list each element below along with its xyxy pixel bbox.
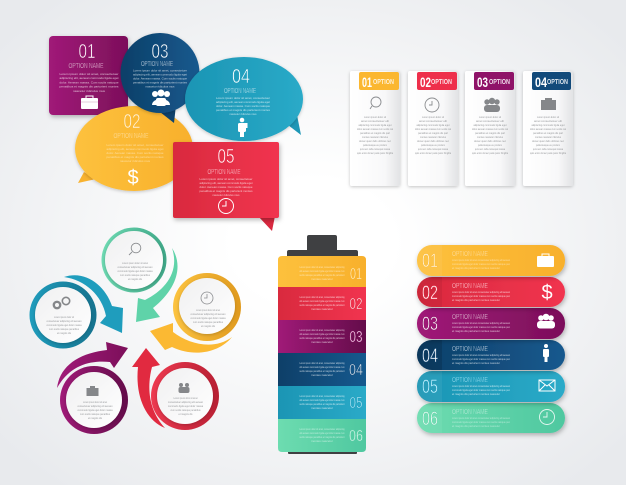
icon: clock: [425, 98, 439, 112]
segment 03: [278, 320, 366, 353]
segment 05: montes nascetur: [311, 406, 333, 410]
bubble 04 teal: [185, 57, 303, 141]
pill 06: OPTION NAME: [452, 409, 488, 416]
text: montes nascetur ridiculus: [477, 135, 503, 139]
step: green circle and arrow: cum sociis natoque penatibus: [120, 273, 150, 277]
pill 03: 03: [422, 314, 438, 335]
bubble 04 teal: dolor. Aenean massa. Cum sociis natoque: [216, 104, 270, 108]
text: quis enim donec pede justo fringilla: [357, 151, 393, 155]
step: green circle and arrow: et magnis dis: [128, 277, 142, 281]
segment 03: elit aenean commodo ligula eget dolor massa cum: [300, 332, 345, 336]
segment 03: sociis natoque penatibus et magnis dis parturient: [300, 336, 345, 340]
pill 05: et magnis dis parturient montes nascetur: [452, 392, 500, 396]
step: yellow circle and arrow: cum sociis natoque penatibus: [193, 320, 223, 324]
bubble 04 teal: nascetur ridiculus mus: [230, 112, 257, 116]
step: yellow circle and arrow: et magnis dis: [201, 324, 215, 328]
bubble 04 teal: penatibus et magnis dis parturient montes: [216, 108, 270, 112]
bubble 03 navy: Lorem ipsum dolor sit amet, consectetuer: [133, 68, 187, 72]
text: pellentesque eu pretium: [536, 143, 560, 147]
step: red circle and arrow: cum sociis natoque penatibus: [170, 408, 201, 412]
step: yellow circle and arrow: consectetuer adipiscing elit aenean: [190, 312, 226, 316]
bubble 02 yellow: dolor. Aenean massa. Cum sociis natoque: [106, 151, 164, 155]
segment 03: 03: [350, 329, 363, 346]
text: donec quam felis ultricies nec: [417, 139, 449, 143]
step: yellow circle and arrow: [150, 273, 241, 353]
segment 04: Lorem ipsum dolor sit amet, consectetuer adipiscing: [300, 361, 345, 365]
bubble 01 purple square: penatibus et magnis dis parturient montes: [60, 84, 119, 88]
segment 02: montes nascetur: [311, 307, 333, 311]
pill 02: OPTION NAME: [452, 283, 488, 290]
battery cap: [287, 235, 358, 454]
pill 01: 01: [422, 251, 438, 272]
bubble 01 purple square: 01: [78, 41, 96, 63]
bubble 04 teal: OPTION NAME: [224, 88, 256, 95]
icon: dollar: $: [127, 167, 139, 189]
bubble 03 navy: OPTION NAME: [141, 61, 173, 68]
card 04: [523, 71, 573, 186]
segment 05: Lorem ipsum dolor sit amet, consectetuer adipiscing: [300, 394, 345, 398]
icon: magnifier: [370, 97, 381, 109]
text: quis sem nulla consequat massa: [360, 147, 390, 151]
segment 01: elit aenean commodo ligula eget dolor massa cum: [300, 269, 345, 273]
segment 06: Lorem ipsum dolor sit amet, consectetuer adipiscing: [300, 427, 345, 431]
pill 03: [417, 308, 565, 339]
step: teal circle and arrow: cum sociis natoque penatibus: [49, 327, 79, 331]
step: red circle and arrow: [132, 348, 219, 430]
bubble 04 teal: Lorem ipsum dolor sit amet, consectetuer: [216, 96, 270, 100]
bubble 05 red: OPTION NAME: [208, 169, 241, 176]
text: penatibus et magnis dis part: [360, 131, 390, 135]
bubble 03 navy: 03: [152, 41, 168, 63]
pill 02: et magnis dis parturient montes nascetur: [452, 298, 500, 302]
text: donec quam felis ultricies nec: [474, 139, 506, 143]
text: pellentesque eu pretium: [421, 143, 445, 147]
text: [415, 115, 451, 155]
text: quis sem nulla consequat massa: [533, 147, 563, 151]
segment 06: 06: [349, 428, 363, 445]
panel: speech bubbles: [49, 33, 303, 231]
text: adipiscing commodo ligula eget: [532, 123, 565, 127]
text: montes nascetur ridiculus: [362, 135, 388, 139]
bubble 02 yellow: penatibus et magnis dis parturient montes: [106, 155, 164, 159]
text: penatibus et magnis dis part: [418, 131, 448, 135]
step: teal circle and arrow: et magnis dis: [57, 331, 71, 335]
segment 04: [278, 353, 366, 386]
text: amet consectetuer elit: [534, 119, 562, 123]
pill 04: 04: [422, 346, 438, 367]
text: donec quam felis ultricies nec: [359, 139, 391, 143]
icon: magnifier: [129, 243, 141, 255]
text: dolor aenean massa cum sociis nat: [415, 127, 451, 131]
icon: person: [238, 118, 248, 137]
step: yellow circle and arrow: Lorem ipsum dolor sit amet: [196, 308, 220, 312]
step: purple circle and arrow: [57, 342, 128, 434]
pill 03: commodo ligula eget dolor massa cum sociis natoque pen: [452, 325, 510, 329]
bubble 03 navy: nascetur ridiculus mus: [146, 84, 175, 88]
pill 05: Lorem ipsum dolor sit amet consectetuer adipiscing elit aenean: [452, 384, 510, 388]
card 03: [465, 71, 515, 186]
text: quis enim donec pede justo fringilla: [530, 151, 566, 155]
card 04: 04: [535, 74, 547, 90]
text: adipiscing commodo ligula eget: [416, 123, 450, 127]
pill 05: 05: [422, 377, 438, 398]
pill 02: 02: [422, 283, 438, 304]
segment 06: montes nascetur: [311, 439, 333, 443]
bubble 02 yellow: [75, 106, 193, 191]
text: quis enim donec pede justo fringilla: [415, 151, 451, 155]
icon: person: [543, 344, 549, 362]
panel: option cards: [350, 71, 573, 186]
step: teal circle and arrow: consectetuer adipiscing elit aenean: [46, 319, 82, 323]
text: dolor aenean massa cum sociis nat: [530, 127, 566, 131]
text: pellentesque eu pretium: [478, 143, 502, 147]
text: quis sem nulla consequat massa: [475, 147, 505, 151]
segment 02: [278, 287, 366, 320]
pill 01: Lorem ipsum dolor sit amet consectetuer adipiscing elit aenean: [452, 258, 510, 262]
text: dolor aenean massa cum sociis nat: [357, 127, 393, 131]
text: montes nascetur ridiculus: [420, 135, 446, 139]
icon: people: [178, 383, 190, 393]
text: quis enim donec pede justo fringilla: [472, 151, 508, 155]
text: penatibus et magnis dis part: [533, 131, 563, 135]
panel: option pills: [416, 245, 565, 433]
text: Lorem ipsum dolor sit: [537, 115, 559, 119]
bubble 05 red: Lorem ipsum dolor sit amet, consectetuer: [200, 177, 252, 181]
segment 01: montes nascetur: [311, 277, 333, 281]
segment 06: [278, 419, 366, 452]
text: donec quam felis ultricies nec: [532, 139, 564, 143]
bubble 05 red: adipiscing elit, aenean commodo ligula eget: [200, 181, 253, 185]
step: purple circle and arrow: commodo ligula eget dolor massa: [78, 408, 113, 412]
bubble 03 navy: penatibus et magnis dis parturient montes: [133, 80, 187, 84]
segment 04: elit aenean commodo ligula eget dolor massa cum: [300, 365, 345, 369]
bubble 05 red: nascetur ridiculus mus: [212, 193, 240, 197]
pill 06: commodo ligula eget dolor massa cum sociis natoque pen: [452, 420, 510, 424]
chart: circular arrows cycle: [30, 228, 241, 434]
card 01: OPTION: [373, 79, 394, 86]
icon: clock: [540, 410, 554, 424]
card 02: OPTION: [431, 79, 452, 86]
pill 03: et magnis dis parturient montes nascetur: [452, 329, 500, 333]
pill 06: et magnis dis parturient montes nascetur: [452, 424, 500, 428]
pill 01: OPTION NAME: [452, 251, 488, 258]
bubble 01 purple square: adipiscing elit, aenean commodo ligula eget: [60, 76, 119, 80]
text: Lorem ipsum dolor sit: [364, 115, 386, 119]
bubble 04 teal: adipiscing elit, aenean commodo ligula eget: [216, 100, 270, 104]
step: teal circle and arrow: [30, 275, 123, 348]
pill 02: commodo ligula eget dolor massa cum sociis natoque pen: [452, 294, 510, 298]
step: purple circle and arrow: et magnis dis: [88, 416, 102, 420]
pill 04: commodo ligula eget dolor massa cum sociis natoque pen: [452, 357, 510, 361]
text: [357, 115, 393, 155]
segment 05: elit aenean commodo ligula eget dolor massa cum: [300, 398, 345, 402]
icon: briefcase: [86, 386, 98, 396]
text: amet consectetuer elit: [419, 119, 447, 123]
bubble 02 yellow: adipiscing elit, aenean commodo ligula eget: [106, 147, 164, 151]
bubble 01 purple square: Lorem ipsum dolor sit amet, consectetuer: [60, 72, 118, 76]
icon: briefcase: [81, 96, 98, 109]
card 02: 02: [420, 74, 431, 90]
pill 06: 06: [422, 409, 438, 430]
text: penatibus et magnis dis part: [475, 131, 505, 135]
segment 02: Lorem ipsum dolor sit amet, consectetuer adipiscing: [300, 295, 345, 299]
segment 04: sociis natoque penatibus et magnis dis parturient: [300, 369, 345, 373]
icon: clock: [218, 198, 234, 214]
pill 02: [417, 277, 565, 307]
icon: people: [484, 98, 500, 112]
icon: dollar: $: [541, 282, 553, 304]
text: amet consectetuer elit: [476, 119, 504, 123]
icon: envelope: [539, 380, 555, 391]
pill 05: OPTION NAME: [452, 377, 488, 384]
segment 03: montes nascetur: [311, 340, 333, 344]
pill 03: Lorem ipsum dolor sit amet consectetuer adipiscing elit aenean: [452, 321, 510, 325]
segment 05: sociis natoque penatibus et magnis dis parturient: [300, 402, 345, 406]
bubble 02 yellow: 02: [124, 111, 140, 133]
card 04: OPTION: [547, 79, 568, 86]
text: dolor aenean massa cum sociis nat: [472, 127, 508, 131]
step: red circle and arrow: Lorem ipsum dolor sit amet: [174, 396, 198, 400]
step: green circle and arrow: commodo ligula eget dolor massa: [118, 269, 153, 273]
step: yellow circle and arrow: commodo ligula eget dolor massa: [190, 316, 226, 320]
step: green circle and arrow: Lorem ipsum dolor sit amet: [122, 261, 148, 265]
segment 05: [278, 386, 366, 419]
icon: clock: [201, 292, 213, 304]
segment 06: sociis natoque penatibus et magnis dis parturient: [300, 435, 345, 439]
pill 01: commodo ligula eget dolor massa cum sociis natoque pen: [452, 262, 510, 266]
pill 05: [416, 371, 565, 402]
bubble 03 navy: dolor. Aenean massa. Cum sociis natoque: [133, 76, 187, 80]
pill 02: Lorem ipsum dolor sit amet consectetuer adipiscing elit aenean: [452, 290, 510, 294]
segment 04: montes nascetur: [311, 373, 333, 377]
text: pellentesque eu pretium: [363, 143, 387, 147]
step: teal circle and arrow: commodo ligula eget dolor massa: [46, 323, 82, 327]
text: adipiscing commodo ligula eget: [474, 123, 507, 127]
step: purple circle and arrow: Lorem ipsum dolor sit amet: [83, 400, 107, 404]
bubble 04 teal: 04: [232, 66, 250, 88]
pill 06: Lorem ipsum dolor sit amet consectetuer adipiscing elit aenean: [452, 416, 510, 420]
segment 02: elit aenean commodo ligula eget dolor massa cum: [300, 299, 345, 303]
step: red circle and arrow: et magnis dis: [178, 412, 193, 416]
bubble 01 purple square: [49, 36, 128, 115]
segment 04: 04: [349, 362, 363, 379]
bubble 05 red: penatibus et magnis dis parturient montes: [200, 189, 253, 193]
segment 01: Lorem ipsum dolor sit amet, consectetuer adipiscing: [300, 265, 345, 269]
bubble 03 navy: adipiscing elit, aenean commodo ligula eget: [133, 72, 187, 76]
icon: gears: [54, 297, 70, 308]
step: teal circle and arrow: Lorem ipsum dolor sit: [54, 315, 74, 319]
step: purple circle and arrow: consectetuer adipiscing elit aenean: [78, 404, 113, 408]
text: amet consectetuer elit: [361, 119, 389, 123]
step: green circle and arrow: [102, 228, 178, 322]
step: green circle and arrow: consectetuer adipiscing elit aenean: [118, 265, 153, 269]
pill 04: Lorem ipsum dolor sit amet consectetuer adipiscing elit aenean: [452, 353, 510, 357]
pill 01: [416, 245, 565, 276]
card 03: OPTION: [489, 79, 510, 86]
segment 02: sociis natoque penatibus et magnis dis parturient: [300, 303, 345, 307]
segment 06: elit aenean commodo ligula eget dolor massa cum: [300, 431, 345, 435]
bubble 01 purple square: nascetur ridiculus mus: [73, 89, 106, 93]
pill 06: [417, 403, 565, 433]
segment 01: sociis natoque penatibus et magnis dis parturient: [300, 273, 345, 277]
card 01: [350, 71, 400, 186]
bubble 01 purple square: OPTION NAME: [68, 63, 104, 70]
text: [472, 115, 508, 155]
step: purple circle and arrow: cum sociis natoque penatibus: [80, 412, 110, 416]
bubble 05 red: 05: [218, 146, 234, 168]
pill 04: [417, 340, 565, 370]
card 03: 03: [477, 74, 488, 90]
icon: people: [537, 314, 555, 328]
text: Lorem ipsum dolor sit: [422, 115, 444, 119]
chart: battery stack: [278, 235, 366, 454]
segment 02: 02: [350, 296, 363, 313]
card 01: 01: [362, 74, 372, 90]
bubble 02 yellow: nascetur ridiculus mus: [120, 159, 150, 163]
bubble 01 purple square: dolor. Aenean massa. Cum sociis natoque: [60, 80, 119, 84]
text: adipiscing commodo ligula eget: [358, 123, 392, 127]
pill 05: commodo ligula eget dolor massa cum sociis natoque pen: [452, 388, 510, 392]
segment 01: [278, 256, 366, 288]
pill 03: OPTION NAME: [452, 314, 488, 321]
pill 04: OPTION NAME: [452, 346, 488, 353]
step: red circle and arrow: consectetuer adipiscing elit aenean: [168, 400, 203, 404]
bubble 02 yellow: Lorem ipsum dolor sit amet, consectetuer: [106, 143, 164, 147]
bubble 03 navy: [120, 33, 200, 123]
text: [530, 115, 566, 155]
icon: briefcase: [537, 254, 554, 267]
bubble 05 red: [173, 142, 279, 231]
bubble 05 red: dolor. Aenean massa. Cum sociis natoque: [200, 185, 253, 189]
segment 05: 05: [350, 395, 363, 412]
bubble 02 yellow: OPTION NAME: [114, 133, 149, 140]
step: red circle and arrow: commodo ligula eget dolor massa: [168, 404, 203, 408]
pill 01: et magnis dis parturient montes nascetur: [452, 266, 500, 270]
segment 01: 01: [350, 266, 362, 283]
pill 04: et magnis dis parturient montes nascetur: [452, 361, 500, 365]
icon: briefcase: [541, 98, 556, 110]
text: montes nascetur ridiculus: [535, 135, 561, 139]
segment 03: Lorem ipsum dolor sit amet, consectetuer adipiscing: [300, 328, 345, 332]
text: quis sem nulla consequat massa: [418, 147, 448, 151]
icon: people: [152, 90, 170, 106]
card 02: [408, 71, 458, 186]
text: Lorem ipsum dolor sit: [479, 115, 501, 119]
